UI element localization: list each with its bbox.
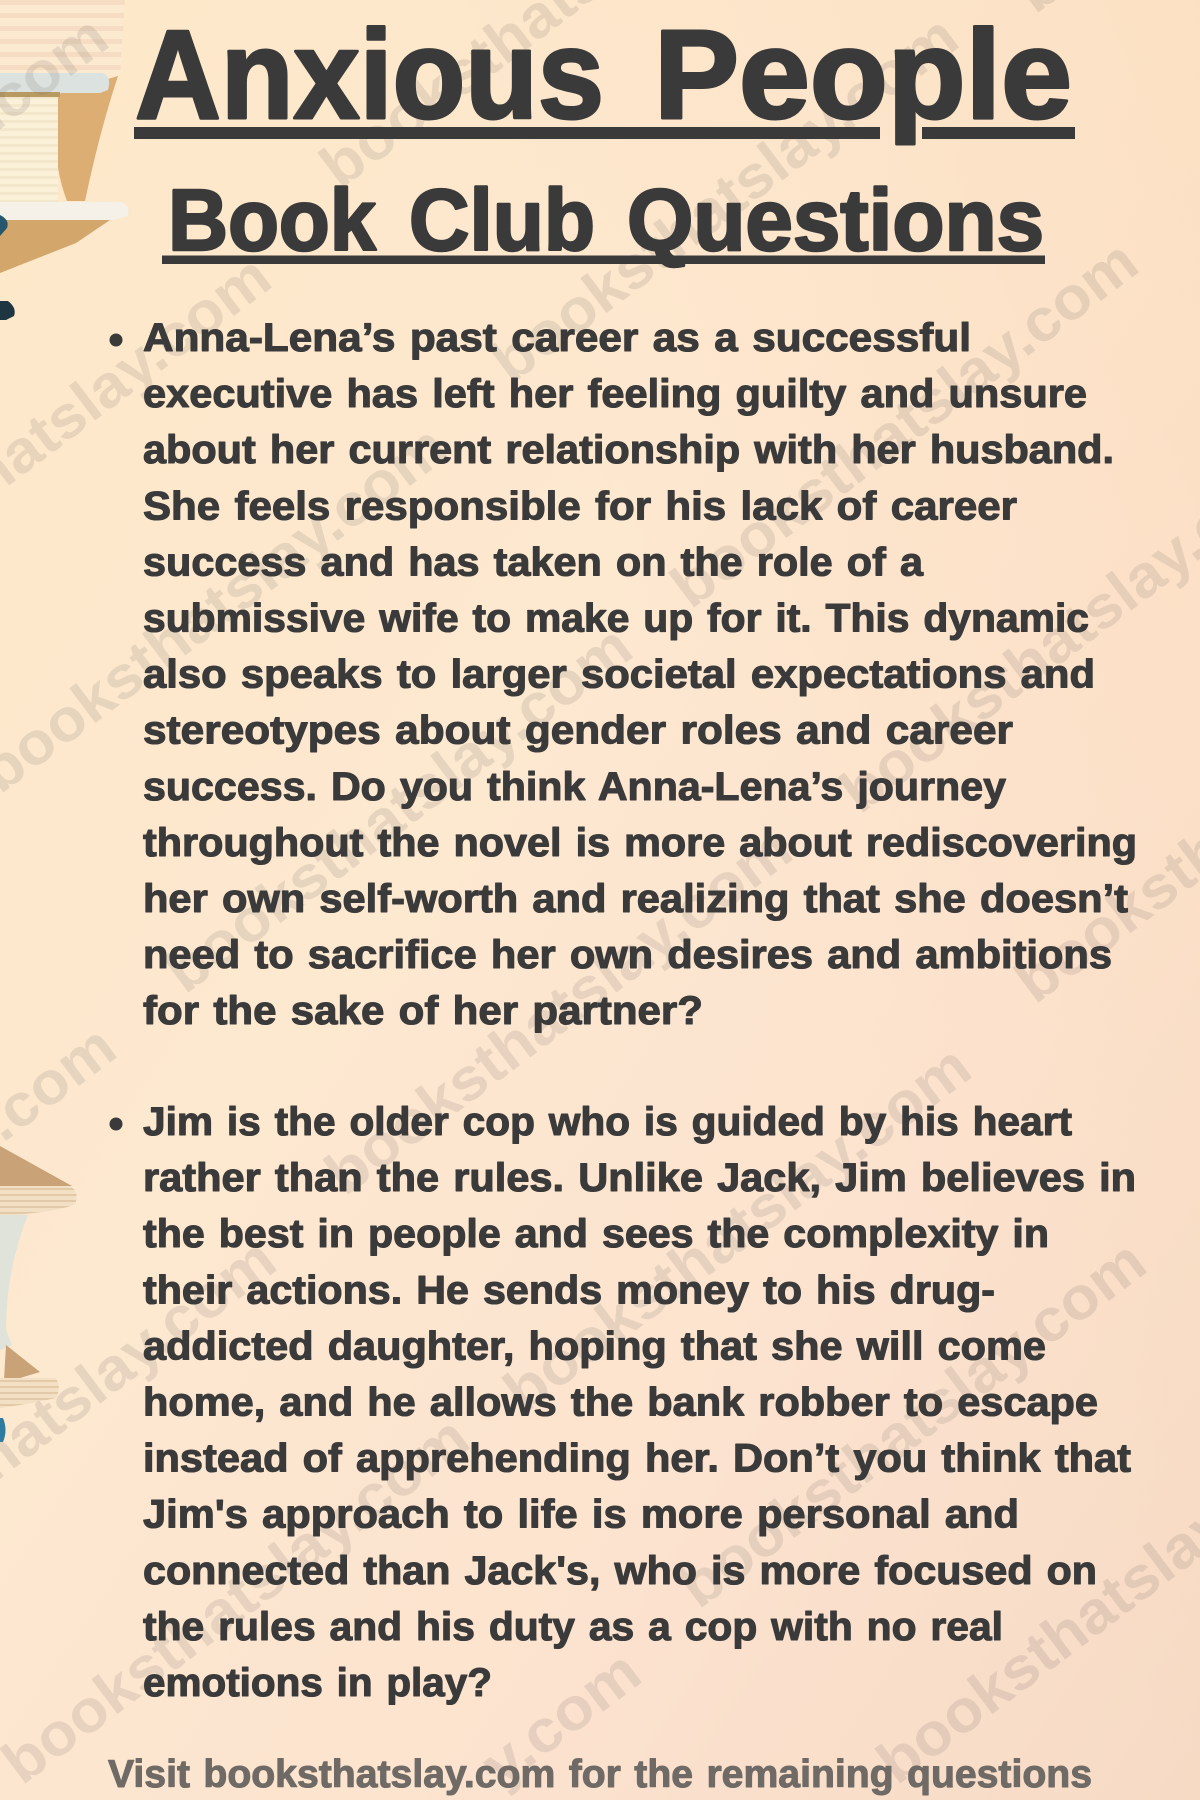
question 2 text block: instead of apprehending her. Don’t you think that: [143, 1437, 1131, 1481]
watermarks: booksthatslay.com: [491, 1032, 983, 1425]
title: Anxious: [135, 4, 604, 145]
title: People: [654, 4, 1072, 145]
question 1 text block: [110, 316, 1137, 1033]
question 1 text block: success and has taken on the role of a: [143, 540, 924, 584]
question 2 text block: [110, 1100, 1136, 1705]
subtitle: Questions: [627, 172, 1044, 269]
book stack illustration: lower left: [0, 1146, 77, 1442]
question 1 text block: about her current relationship with her husband.: [143, 428, 1114, 472]
watermarks: booksthatslay.com: [666, 1227, 1158, 1620]
question 2 text block: rather than the rules. Unlike Jack, Jim believes in: [143, 1156, 1136, 1200]
question 1 text block: submissive wife to make up for it. This dynamic: [143, 596, 1089, 640]
question 1 text block: executive has left her feeling guilty and unsure: [143, 372, 1087, 416]
question 2 text block: Jim's approach to life is more personal and: [143, 1493, 1019, 1537]
bullet 2: [110, 1118, 122, 1130]
watermarks: booksthatslay.com: [479, 2, 970, 395]
watermarks: booksthatslay.com: [313, 814, 804, 1207]
footer call to action: Visit booksthatslay.com for the remaining questions: [108, 1753, 1092, 1796]
watermarks: y.com: [469, 1637, 653, 1799]
question 2 text block: their actions. He sends money to his drug-: [143, 1268, 995, 1312]
question 1 text block: She feels responsible for his lack of career: [143, 484, 1017, 528]
subtitle: Book: [168, 172, 377, 269]
bullet 1: [110, 334, 122, 346]
question 1 text block: also speaks to larger societal expectations and: [143, 653, 1095, 697]
watermarks: booksthatslay.com: [658, 227, 1150, 620]
subtitle: Club: [409, 172, 595, 269]
question 1 text block: throughout the novel is more about rediscovering: [143, 821, 1137, 865]
book stack illustration: top left: [0, 0, 129, 320]
subtitle: [162, 172, 1045, 269]
watermarks: booksthatslay.com: [153, 612, 644, 1005]
title: [134, 4, 1075, 145]
question 2 text block: home, and he allows the bank robber to escape: [143, 1380, 1098, 1424]
question 2 text block: the best in people and sees the complexity in: [143, 1212, 1049, 1256]
question 1 text block: need to sacrifice her own desires and ambitions: [143, 933, 1112, 977]
question 1 text block: for the sake of her partner?: [143, 989, 703, 1033]
question 2 text block: connected than Jack's, who is more focused on: [143, 1549, 1097, 1593]
watermarks: booksthatslay.com: [0, 1403, 481, 1796]
question 2 text block: emotions in play?: [143, 1661, 492, 1705]
question 2 text block: Jim is the older cop who is guided by his heart: [143, 1100, 1072, 1144]
question 2 text block: the rules and his duty as a cop with no real: [143, 1605, 1003, 1649]
question 1 text block: stereotypes about gender roles and career: [143, 709, 1013, 753]
question 1 text block: her own self-worth and realizing that she doesn’t: [143, 877, 1128, 921]
question 1 text block: Anna-Lena’s past career as a successful: [143, 316, 971, 360]
question 1 text block: success. Do you think Anna-Lena’s journey: [143, 765, 1007, 809]
question 2 text block: addicted daughter, hoping that she will come: [143, 1324, 1046, 1368]
